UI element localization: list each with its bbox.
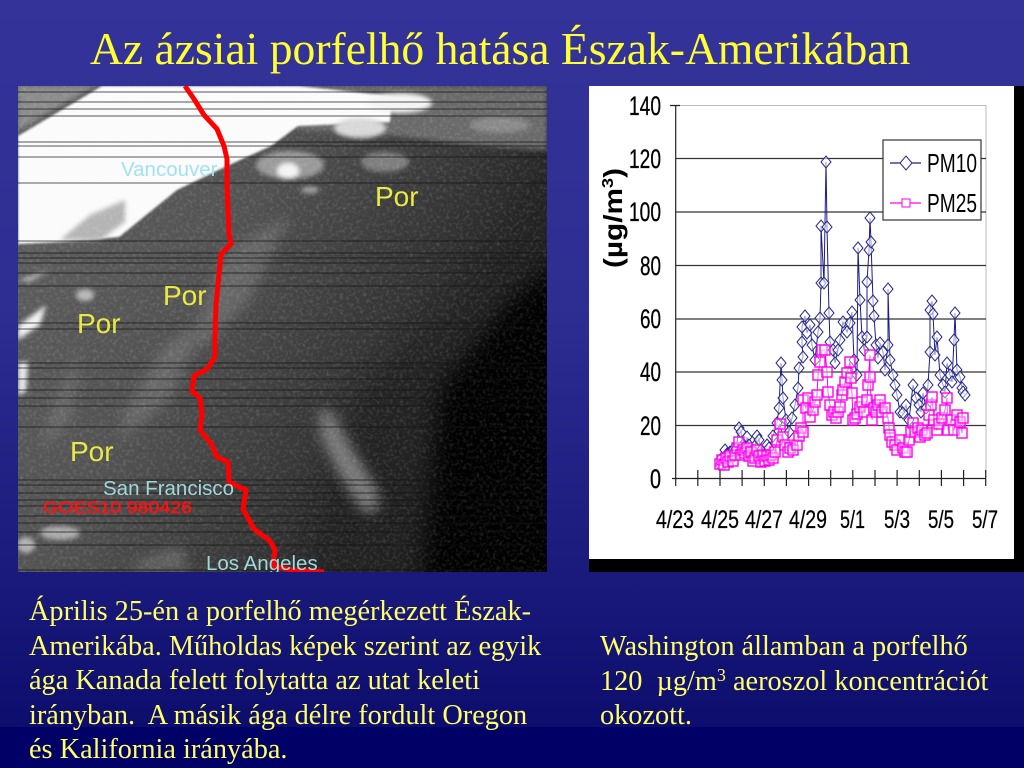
y axis title: (µg/m <box>598 198 628 268</box>
y axis labels: 20 <box>640 411 661 441</box>
gridlines <box>676 158 986 426</box>
white chart background <box>589 86 1014 559</box>
label: satellite id: GOES10 980426 <box>43 498 192 517</box>
y axis labels: 140 <box>629 91 661 121</box>
legend <box>883 140 981 220</box>
black shadow <box>589 86 1024 572</box>
legend: PM10 <box>927 148 977 178</box>
axes and ticks <box>670 105 986 486</box>
PM25 series <box>720 350 963 465</box>
left caption text: ága Kanada felett folytatta az utat keleti <box>29 665 480 696</box>
white cloud mass <box>18 86 392 244</box>
y axis labels: 120 <box>629 144 661 174</box>
horizontal scan lines <box>18 92 547 570</box>
label: Por 3: Por <box>77 308 121 339</box>
legend: PM25 <box>927 188 977 218</box>
grey cloud at top-left corner <box>18 86 95 130</box>
satellite image panel <box>18 86 547 572</box>
x axis labels: 5/1 <box>840 506 865 534</box>
label: Por 2: Por <box>163 280 207 311</box>
dust plume streaks <box>40 215 290 572</box>
red coastline <box>185 86 324 572</box>
inland cloud streak <box>318 410 378 512</box>
y axis labels: 40 <box>640 357 661 387</box>
label: San Francisco: San Francisco <box>103 477 234 500</box>
y axis labels: 0 <box>650 464 661 494</box>
y axis labels <box>629 91 661 494</box>
right caption text: okozott. <box>600 700 692 731</box>
grey upper-right cloud deck <box>298 86 547 150</box>
label: Vancouver: Vancouver <box>121 158 218 181</box>
right caption text: 120 µg/m3 aeroszol koncentrációt <box>600 665 988 697</box>
left caption text <box>29 596 542 765</box>
left caption text: Amerikába. Műholdas képek szerint az egyik <box>29 631 541 662</box>
y axis title: 3 <box>600 178 617 188</box>
label: Por 4: Por <box>70 436 114 467</box>
x axis labels: 4/25 <box>701 506 739 534</box>
y axis labels: 60 <box>640 304 661 334</box>
PM10 series <box>720 162 965 465</box>
chart panel <box>589 86 1024 572</box>
plot frame <box>676 106 986 478</box>
x axis labels: 4/29 <box>789 506 827 534</box>
image texture <box>18 86 547 572</box>
left caption text: irányban. A másik ága délre fordult Oregon <box>29 700 527 731</box>
label: Por 1: Por <box>375 181 419 212</box>
broken clouds <box>18 93 530 395</box>
x axis labels: 5/3 <box>884 506 910 534</box>
x axis labels: 4/27 <box>745 506 783 534</box>
x axis labels <box>656 506 998 534</box>
ocean background <box>18 86 547 572</box>
y axis labels: 80 <box>640 251 661 281</box>
right caption text <box>600 631 988 731</box>
x axis labels: 5/7 <box>972 506 998 534</box>
right caption text: Washington államban a porfelhő <box>600 631 968 662</box>
y axis title: ) <box>598 168 628 178</box>
title: Az ázsiai porfelhő hatása Észak-Amerikában <box>90 23 910 74</box>
left caption text: Április 25-én a porfelhő megérkezett Észak- <box>29 596 531 627</box>
left caption text: és Kalifornia irányába. <box>29 734 288 765</box>
x axis labels: 4/23 <box>656 506 694 534</box>
x axis labels: 5/5 <box>928 506 954 534</box>
dark south-east area <box>300 170 570 600</box>
y axis labels: 100 <box>629 197 661 227</box>
